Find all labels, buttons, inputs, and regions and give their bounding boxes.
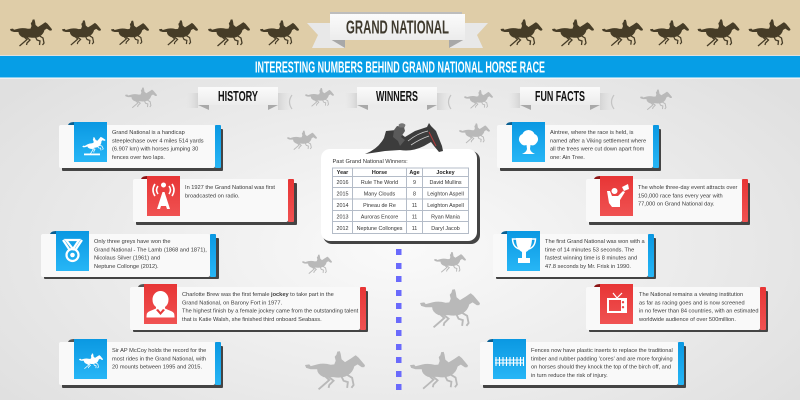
card: fences <box>480 339 686 388</box>
card: fences: in turn reduce the risk of injury. <box>531 373 608 379</box>
card: television: worldwide audience of over 500million. <box>638 317 736 323</box>
card: radio: broadcasted on radio. <box>185 193 240 199</box>
card: Aintree: named after a Viking settlement where <box>550 138 646 144</box>
winners table <box>332 168 468 234</box>
heading: history <box>186 87 292 110</box>
card: handicap steeplechase: (6.907 km) with horses jumping 30 <box>112 147 198 153</box>
icon: jockey on horse <box>365 123 443 154</box>
card: handicap steeplechase: Grand National is a handicap <box>112 130 185 136</box>
winners table: 2013 <box>336 214 348 220</box>
winners table: 8 <box>413 191 416 197</box>
icon: tree <box>519 130 538 154</box>
card: first winner: fastest winning time is 8 minutes and <box>545 256 637 262</box>
winners table: Year <box>337 170 349 176</box>
heading: winners: WINNERS <box>376 88 418 105</box>
card: radio: In 1927 the Grand National was first <box>185 185 275 191</box>
card: three greys: Nicolaus Silver (1961) and <box>94 256 160 262</box>
subtitle: INTERESTING NUMBERS BEHIND GRAND NATIONAL HORSE RACE <box>255 60 545 76</box>
icon: TV <box>607 293 627 313</box>
winners table: 2015 <box>336 191 348 197</box>
title text: GRAND NATIONAL <box>346 16 449 38</box>
card: race fans: The whole three-day event attracts over <box>638 185 738 191</box>
card: three greys <box>41 231 219 279</box>
heading: winners <box>345 87 451 110</box>
card: AP McCoy <box>59 339 223 388</box>
grey background horses <box>125 88 672 389</box>
winners table: David Mullins <box>429 180 462 186</box>
winners table: Rule The World <box>361 180 398 186</box>
row of horses left <box>10 19 299 46</box>
card: Aintree: all the trees were cut down apart from <box>550 147 645 153</box>
winners table: Neptune Collonges <box>357 226 403 232</box>
card: fences: on horses should they knock the top of the birch off, and <box>531 365 671 371</box>
card: handicap steeplechase: fences over two laps. <box>112 155 165 161</box>
centre dotted line <box>396 249 402 390</box>
winners table: Pineau de Re <box>363 203 396 209</box>
card: female jockey: that is Katie Walsh, she finished third onboard Seabass. <box>182 317 322 323</box>
card: fences: timber and rubber padding 'cores' and are more forgiving <box>531 356 673 362</box>
winners table: 11 <box>412 203 417 209</box>
card: first winner <box>493 231 656 279</box>
card: female jockey <box>130 284 368 332</box>
winners table: Auroras Encore <box>361 214 398 220</box>
card: handicap steeplechase <box>59 122 223 171</box>
card: television: as far as racing goes and is now screened <box>639 300 745 306</box>
card: AP McCoy: most rides in the Grand National, with <box>112 356 206 362</box>
winners table: 2012 <box>336 226 348 232</box>
row of horses right <box>500 19 790 46</box>
winners table: Daryl Jacob <box>431 226 460 232</box>
card: first winner: The first Grand National was won with a <box>545 239 646 245</box>
winners table: 11 <box>412 214 417 220</box>
card: AP McCoy: Sir AP McCoy holds the record for the <box>112 348 206 354</box>
card: three greys: Neptune Collonge (2012). <box>94 264 159 270</box>
card: fences: Fences now have plastic inserts to replace the traditional <box>531 348 673 354</box>
winners panel <box>321 123 480 244</box>
icon: horse and rider <box>79 354 103 369</box>
card: television: in no fewer than 84 countries, with an estimated <box>639 309 758 315</box>
card: three greys: Grand National - The Lamb (1868 and 1871), <box>94 247 207 253</box>
winners table: Age <box>409 170 420 176</box>
card: radio <box>133 176 297 225</box>
header band <box>0 0 800 55</box>
winners table: 2016 <box>336 180 348 186</box>
winners table: 11 <box>412 226 417 232</box>
blue subtitle band <box>0 56 800 78</box>
card: race fans: 77,000 on Grand National day. <box>638 202 715 208</box>
card: female jockey: Grand National, on Barony Fort in 1977. <box>182 300 282 306</box>
winners table: Horse <box>372 170 387 176</box>
icon: trophy <box>512 238 536 263</box>
winners table: Leighton Aspell <box>427 203 464 209</box>
heading: fun facts <box>508 87 614 110</box>
card: first winner: 47.8 seconds by Mr. Frisk in 1990. <box>545 264 631 270</box>
icon: medal <box>63 240 82 261</box>
card: Aintree: Aintree, where the race is held, is <box>550 130 634 136</box>
card: television <box>586 284 768 332</box>
winners table: 9 <box>413 180 416 186</box>
heading: history: HISTORY <box>218 88 258 105</box>
icon: woman <box>146 291 174 318</box>
heading: fun facts: FUN FACTS <box>535 88 585 105</box>
card: Aintree: one: Ain Tree. <box>550 155 585 161</box>
winners table: 2014 <box>336 203 348 209</box>
winners table: Many Clouds <box>364 191 396 197</box>
table title: Past Grand National Winners: <box>332 159 408 165</box>
card: television: The National remains a viewing institution <box>639 292 743 298</box>
card: female jockey: Charlotte Brew was the first female jockey to take part in the <box>182 292 334 298</box>
card: race fans <box>586 176 750 225</box>
winners table: Jockey <box>436 170 455 176</box>
card: handicap steeplechase: steeplechase over 4 miles 514 yards <box>112 138 204 144</box>
card: race fans: 150,000 race fans every year with <box>638 193 723 199</box>
card: AP McCoy: 20 mounts between 1995 and 2015. <box>112 365 202 371</box>
winners table: Ryan Mania <box>431 214 460 220</box>
card: female jockey: The highest finish by a female jockey came from the outstanding talent <box>182 309 359 315</box>
title ribbon <box>307 12 488 48</box>
winners table: Leighton Aspell <box>427 191 464 197</box>
icon: show jumping horse <box>81 134 108 156</box>
icon: fan with flag <box>607 184 629 207</box>
card: three greys: Only three greys have won the <box>94 239 171 245</box>
card: Aintree <box>497 122 661 171</box>
icon: radio tower <box>153 182 174 209</box>
icon: fence <box>495 357 524 366</box>
card: first winner: time of 14 minutes 53 seconds. The <box>545 247 634 253</box>
